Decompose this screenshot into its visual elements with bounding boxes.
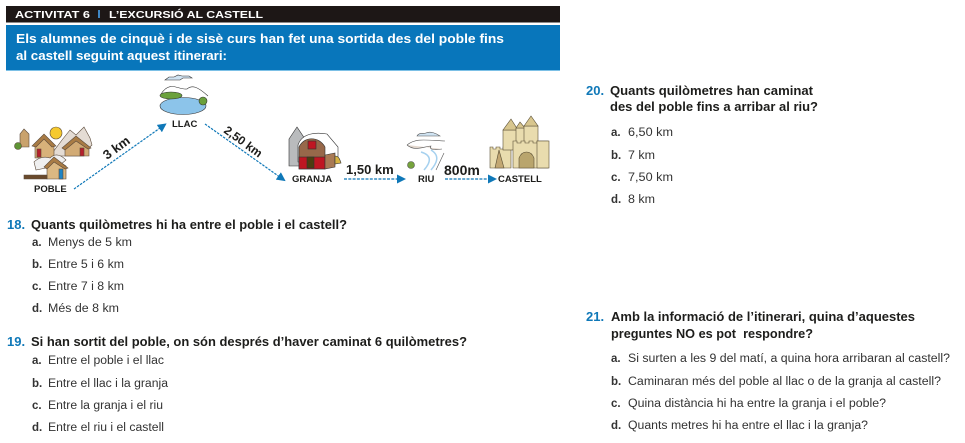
question 21: b. xyxy=(611,376,621,388)
question 18: b. xyxy=(32,259,42,271)
question 19: Entre el poble i el llac xyxy=(48,355,164,367)
question 20: a. xyxy=(611,127,621,139)
intro panel: blue statement: Els alumnes de cinquè i de sisè curs han fet una sortida des del poble fins xyxy=(16,31,504,46)
distance: 800m: 800m xyxy=(444,162,480,178)
question 18: c. xyxy=(32,281,42,293)
question 21: Si surten a les 9 del matí, a quina hora arribaran al castell? xyxy=(628,353,950,365)
distance: 3 km: 3 km xyxy=(100,133,133,162)
question 19 xyxy=(7,334,467,434)
intro panel: blue statement: al castell seguint aquest itinerari: xyxy=(16,48,227,63)
icon: castle xyxy=(490,116,549,168)
question 19: d. xyxy=(32,422,42,434)
icon: village xyxy=(14,127,92,179)
question 21: d. xyxy=(611,420,621,432)
question 21: c. xyxy=(611,398,621,410)
question 18: Entre 5 i 6 km xyxy=(48,259,124,271)
label: POBLE: POBLE xyxy=(34,184,67,195)
question 19: Si han sortit del poble, on són després d’haver caminat 6 quilòmetres? xyxy=(31,335,467,349)
question 21: Quina distància hi ha entre la granja i el poble? xyxy=(628,398,886,410)
question 20: c. xyxy=(611,172,621,184)
question 18: a. xyxy=(32,237,42,249)
icon: lake xyxy=(160,75,208,114)
intro panel: blue statement xyxy=(6,25,560,71)
question 21: 21. xyxy=(586,309,604,324)
question 20 xyxy=(586,83,818,206)
question 20: b. xyxy=(611,150,621,162)
question 18: Més de 8 km xyxy=(48,303,119,315)
question 19: c. xyxy=(32,400,42,412)
question 21 xyxy=(586,309,950,432)
question 20: Quants quilòmetres han caminat xyxy=(610,84,814,98)
arrow: granja to riu xyxy=(344,178,404,180)
question 21: Quants metres hi ha entre el llac i la granja? xyxy=(628,420,868,432)
header bar: activity title xyxy=(6,6,560,22)
question 20: 7 km xyxy=(628,150,655,162)
question 18: Entre 7 i 8 km xyxy=(48,281,124,293)
question 20: 20. xyxy=(586,83,604,98)
question 19: b. xyxy=(32,378,42,390)
question 19: a. xyxy=(32,355,42,367)
question 19: Entre el riu i el castell xyxy=(48,422,164,434)
label: LLAC: LLAC xyxy=(172,119,197,130)
question 21: preguntes NO es pot respondre? xyxy=(611,327,813,341)
question 18: Menys de 5 km xyxy=(48,237,132,249)
arrow: poble to llac xyxy=(74,124,165,189)
label: RIU: RIU xyxy=(418,174,434,185)
question 21: Caminaran més del poble al llac o de la granja al castell? xyxy=(628,376,941,388)
question 19: 19. xyxy=(7,334,25,349)
question 18: 18. xyxy=(7,217,25,232)
question 20: 6,50 km xyxy=(628,127,673,139)
question 20: 7,50 km xyxy=(628,172,673,184)
question 20: des del poble fins a arribar al riu? xyxy=(610,100,818,114)
question 19: Entre la granja i el riu xyxy=(48,400,163,412)
question 21: a. xyxy=(611,353,621,365)
question 21: Amb la informació de l’itinerari, quina d’aquestes xyxy=(611,310,915,324)
arrow: llac to granja xyxy=(205,124,284,180)
question 19: Entre el llac i la granja xyxy=(48,378,169,390)
question 18: Quants quilòmetres hi ha entre el poble i el castell? xyxy=(31,218,347,232)
arrow: riu to castell xyxy=(445,178,495,180)
question 20: d. xyxy=(611,194,621,206)
header bar: activity title: L’EXCURSIÓ AL CASTELL xyxy=(109,8,264,21)
label: CASTELL: CASTELL xyxy=(498,174,542,185)
distance: 1,50 km: 1,50 km xyxy=(346,162,394,177)
distance: 2,50 km: 2,50 km xyxy=(221,123,265,160)
icon: barn xyxy=(289,127,341,169)
question 18: d. xyxy=(32,303,42,315)
question 20: 8 km xyxy=(628,194,655,206)
question 18 xyxy=(7,217,347,315)
icon: river xyxy=(407,132,445,170)
label: GRANJA: GRANJA xyxy=(292,174,332,185)
header bar: activity title: ACTIVITAT 6 xyxy=(15,9,90,21)
itinerary diagram xyxy=(14,75,549,195)
